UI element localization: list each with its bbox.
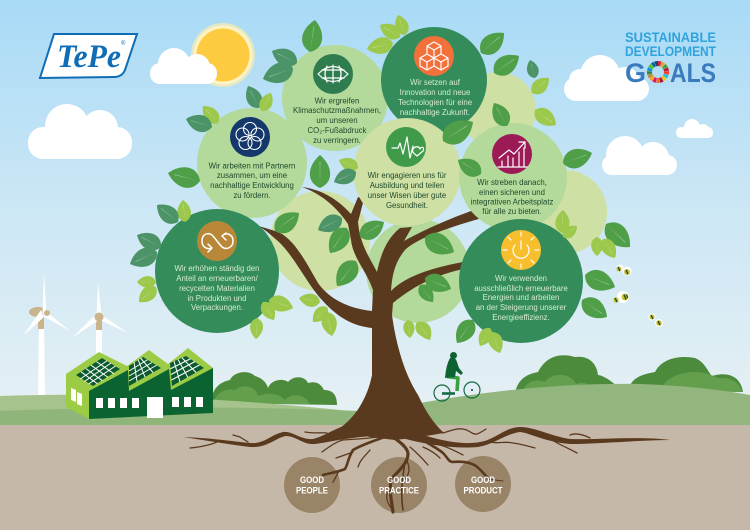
panel: innovation: nachhaltige Zukunft.: [400, 108, 470, 117]
label: good practice: [379, 475, 419, 496]
TePe logo: TePe: [57, 39, 121, 75]
panel: renewable energy: [459, 219, 583, 343]
panel: renewable energy: Wir verwenden: [495, 274, 547, 283]
panel: climate action: Klimaschutzmaßnahmen,: [293, 106, 381, 115]
icon: power sun: [501, 230, 541, 270]
Sustainable Development Goals logo: [625, 29, 716, 88]
panel: climate action: [282, 45, 388, 151]
leaves: [126, 13, 637, 355]
panel: inclusive workplace: für alle zu bieten.: [482, 207, 542, 216]
panel: recycled materials: [155, 209, 279, 333]
panel: innovation: Innovation und neue: [400, 88, 470, 97]
label: good practice: PRACTICE: [379, 486, 419, 496]
panel: inclusive workplace: Wir streben danach,: [477, 178, 547, 187]
panel: health and education: unser Wisen über gute: [368, 191, 446, 200]
icon: recycling infinity: [197, 221, 237, 261]
label: good product: [464, 475, 503, 496]
panel: inclusive workplace: [459, 123, 567, 231]
good foundation circles: [284, 456, 511, 513]
icon: interlocking circles: [230, 117, 270, 157]
panel: inclusive workplace: integrativen Arbeitsplatz: [471, 198, 553, 206]
panel: partnerships: zu fördern.: [233, 191, 271, 200]
panel: climate action: CO₂-Fußabdruck: [308, 126, 367, 135]
TePe logo: ®: [121, 40, 126, 47]
icon: globe eye: [313, 54, 353, 94]
label: good people: GOOD: [300, 475, 324, 486]
tree roots: [183, 424, 670, 512]
panel: recycled materials: Verpackungen.: [191, 303, 243, 312]
TePe logo: [40, 34, 137, 78]
tree trunk and branches: [258, 187, 482, 440]
cyclist: [434, 352, 480, 401]
panel: renewable energy: ausschließlich erneuerbare: [474, 284, 568, 293]
label: good people: [296, 475, 328, 496]
wind turbine right: [73, 283, 128, 365]
hills: [0, 384, 750, 426]
panel: recycled materials: recycelten Materialien: [179, 284, 255, 293]
panel: innovation: Wir setzen auf: [410, 78, 461, 87]
wind turbine left: [23, 273, 70, 396]
icon: growth chart: [492, 134, 532, 174]
bees: [613, 264, 663, 327]
label: good people: PEOPLE: [296, 486, 328, 496]
bushes left: [211, 372, 337, 405]
Sustainable Development Goals logo: DEVELOPMENT: [625, 43, 716, 59]
panel: recycled materials: in Produkten und: [188, 294, 246, 303]
icon: cubes: [414, 36, 454, 76]
panel: climate action: um unseren: [316, 116, 358, 125]
factory with solar roofs: [66, 348, 213, 419]
panel: health and education: [353, 118, 461, 226]
panel: health and education: Ausbildung und teilen: [370, 181, 444, 190]
Sustainable Development Goals logo: SUSTAINABLE: [625, 29, 716, 45]
panel: innovation: [381, 27, 487, 133]
panel: partnerships: Wir arbeiten mit Partnern: [209, 162, 295, 170]
label: good practice: GOOD: [387, 475, 411, 486]
bushes right: [515, 355, 743, 393]
panel: partnerships: nachhaltige Entwicklung: [210, 181, 294, 190]
panel: inclusive workplace: einen sicheren und: [479, 188, 545, 197]
pale background foliage circles: [270, 72, 607, 323]
Sustainable Development Goals logo: G: [625, 58, 646, 88]
panel: renewable energy: Energieeffizienz.: [492, 313, 550, 322]
sun: [191, 23, 255, 87]
panel: health and education: Wir engagieren uns für: [368, 171, 447, 180]
panel: renewable energy: Energien und arbeiten: [483, 293, 559, 302]
panel: recycled materials: Anteil an erneuerbaren/: [176, 274, 259, 283]
icon: heartbeat: [386, 127, 426, 167]
panel: recycled materials: Wir erhöhen ständig den: [175, 264, 259, 273]
panel: innovation: Technologien für eine: [398, 98, 472, 107]
ground: [0, 425, 750, 530]
Sustainable Development Goals logo: ALS: [670, 58, 716, 88]
label: good product: GOOD: [471, 475, 495, 486]
panel: renewable energy: an der Steigerung unserer: [476, 303, 567, 312]
panel: partnerships: zusammen, um eine: [217, 171, 287, 180]
panel: health and education: Gesundheit.: [386, 201, 428, 210]
panel: partnerships: [197, 108, 307, 218]
clouds: [28, 48, 713, 175]
panel: climate action: Wir ergreifen: [315, 96, 359, 106]
panel: climate action: zu verringern.: [313, 136, 361, 145]
label: good product: PRODUCT: [464, 486, 503, 496]
